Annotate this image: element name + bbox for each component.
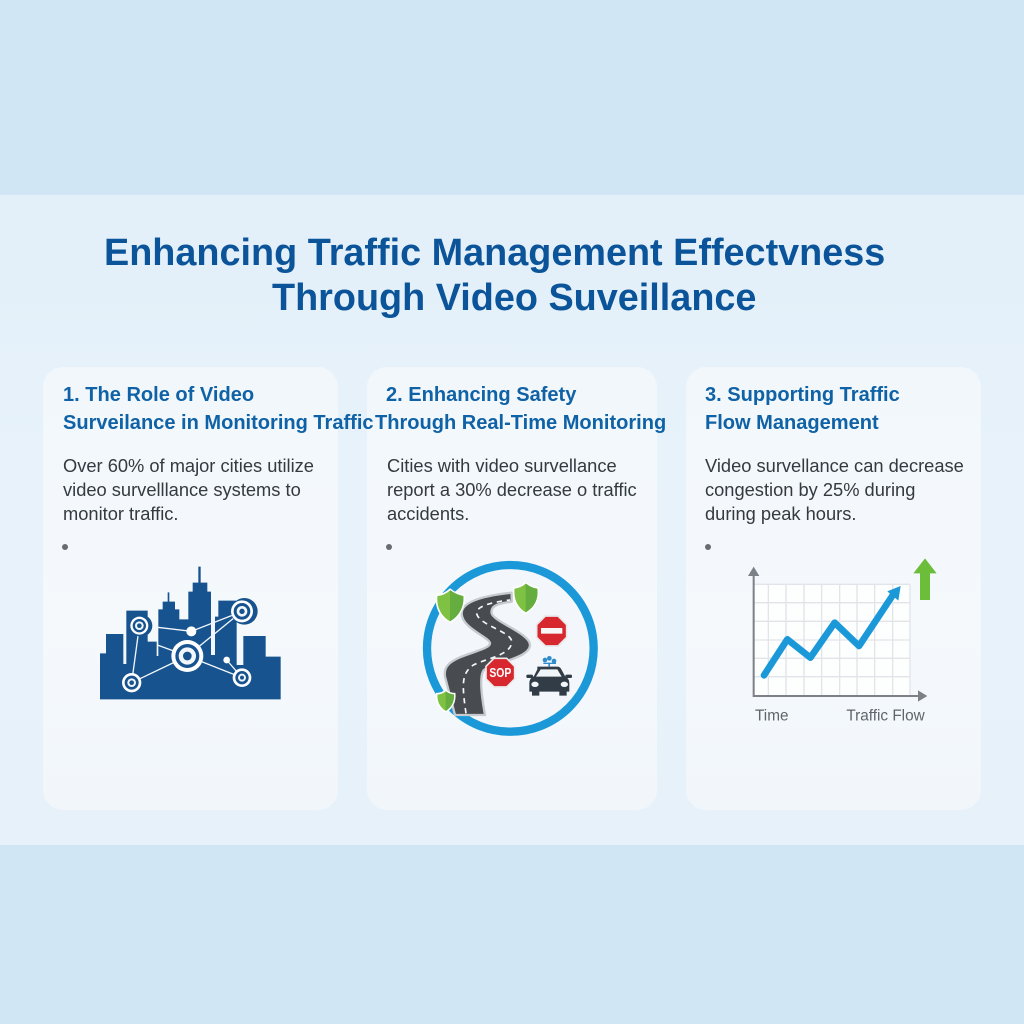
panel: enhancing safety card [367, 367, 657, 810]
title [104, 232, 885, 319]
trend line [764, 586, 901, 675]
no entry sign [537, 616, 567, 646]
text: card 1 body [63, 455, 314, 524]
heading: card 3: Flow Management [705, 412, 879, 434]
stop sign: SOP [489, 666, 512, 680]
text: card 2 body: Cities with video survellance [387, 455, 617, 476]
text: card 2 body: report a 30% decrease o traffic [387, 479, 637, 500]
shield 1 [436, 589, 464, 622]
ring [427, 565, 594, 732]
text: card 3 body: congestion by 25% during [705, 479, 915, 500]
text: card 1 body: Over 60% of major cities utilize [63, 455, 314, 476]
shield 3 [437, 690, 455, 712]
chart: traffic flow line chart [748, 558, 937, 725]
winding road [445, 593, 530, 715]
text: card 3 body: during peak hours. [705, 503, 856, 524]
police car [526, 656, 572, 696]
shield 2 [514, 583, 538, 613]
text: card 2 body: accidents. [387, 503, 469, 524]
text: card 3 body [705, 455, 964, 524]
text: card 1 body: video survelllance systems to [63, 479, 301, 500]
grid [754, 584, 910, 696]
heading: card 1: Surveilance in Monitoring Traffic [63, 412, 374, 434]
heading: card 2: 2. Enhancing Safety [386, 384, 576, 406]
up arrow [913, 558, 937, 600]
middle background band [0, 195, 1024, 845]
heading: card 2: Through Real-Time Monitoring [375, 412, 666, 434]
heading: card 1 [63, 384, 374, 434]
stop sign [486, 658, 515, 687]
axes [748, 567, 927, 702]
title: Enhancing Traffic Management Effectvness [104, 232, 885, 274]
text: card 2 body [387, 455, 637, 524]
chart: traffic flow line chart: Traffic Flow [846, 708, 926, 725]
text: card 1 body: monitor traffic. [63, 503, 178, 524]
bullet: card 3 [705, 544, 711, 550]
heading: card 3: 3. Supporting Traffic [705, 384, 900, 406]
heading: card 3 [705, 384, 900, 434]
axis labels: Time [755, 708, 788, 725]
title: Through Video Suveillance [272, 277, 756, 319]
panel: traffic flow card [686, 367, 981, 810]
heading: card 1: 1. The Role of Video [63, 384, 254, 406]
panel: role of video surveillance card [43, 367, 338, 810]
heading: card 2 [375, 384, 666, 434]
icon: city skyline network [100, 566, 281, 700]
icon: road safety circle [422, 560, 598, 736]
text: card 3 body: Video survellance can decrease [705, 455, 964, 476]
bullet: card 2 [386, 544, 392, 550]
bullet: card 1 [62, 544, 68, 550]
